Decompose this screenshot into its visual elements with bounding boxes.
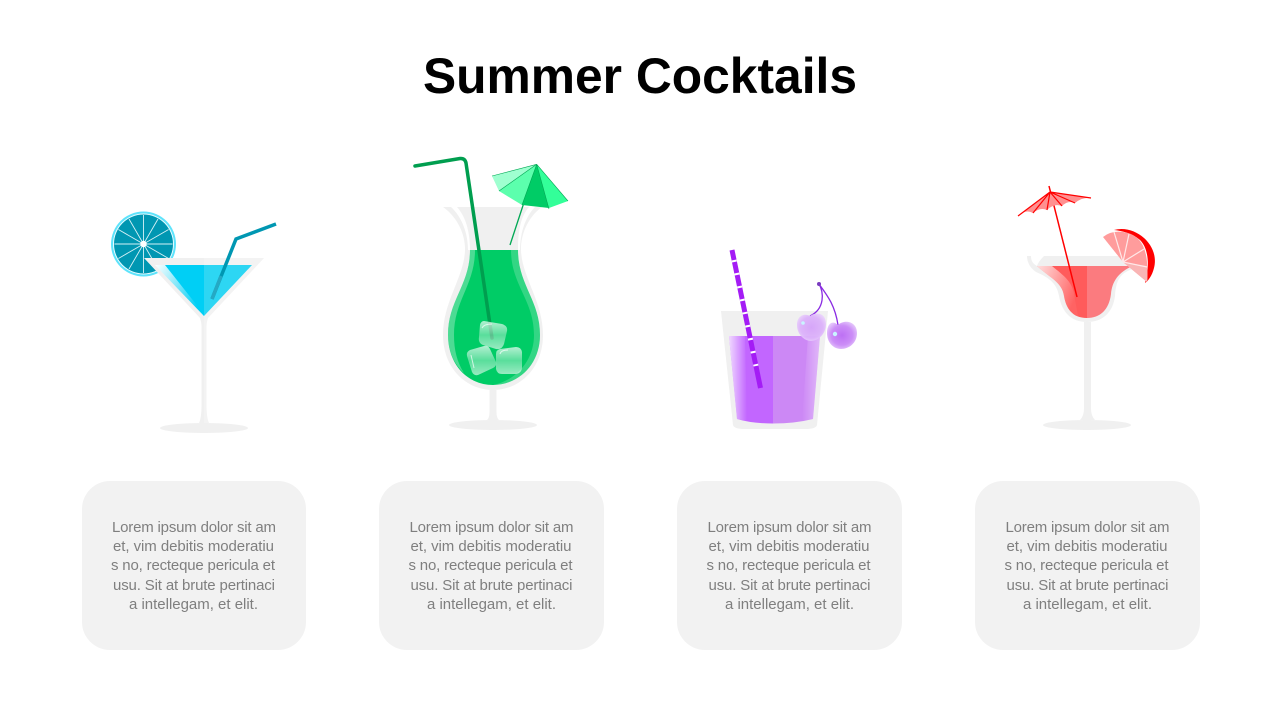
card text: et, vim debitis moderatiu — [113, 538, 274, 555]
card text: s no, recteque pericula et — [706, 557, 871, 574]
card text — [111, 519, 276, 613]
card text: Lorem ipsum dolor sit am — [708, 519, 872, 536]
icon: cherries — [797, 282, 857, 349]
card text — [408, 519, 574, 613]
cocktail: green hurricane — [415, 158, 568, 430]
card text: Lorem ipsum dolor sit am — [410, 519, 574, 536]
card text: a intellegam, et elit. — [725, 596, 854, 613]
card text: et, vim debitis moderatiu — [708, 538, 870, 555]
card text: a intellegam, et elit. — [129, 596, 258, 613]
icon: grapefruit wedge — [1103, 229, 1155, 283]
icon: cocktail umbrella — [492, 164, 568, 245]
glass: hurricane — [443, 207, 543, 430]
liquid — [155, 265, 252, 316]
straw — [732, 250, 760, 388]
card text — [1004, 519, 1170, 613]
icon: cocktail umbrella — [1018, 186, 1091, 297]
liquid — [1037, 266, 1133, 318]
card text: s no, recteque pericula et — [111, 557, 276, 574]
glass: martini — [144, 258, 264, 433]
card text: s no, recteque pericula et — [1004, 557, 1169, 574]
straw — [415, 158, 492, 338]
icon: ice cubes — [467, 321, 522, 375]
card text: usu. Sit at brute pertinaci — [410, 577, 572, 594]
card text: usu. Sit at brute pertinaci — [113, 577, 275, 594]
card text: usu. Sit at brute pertinaci — [1006, 577, 1168, 594]
panel: text card 1 — [82, 481, 306, 650]
card text: usu. Sit at brute pertinaci — [708, 577, 870, 594]
straw — [212, 224, 276, 299]
cocktail: red margarita — [1018, 186, 1155, 430]
card text: a intellegam, et elit. — [1023, 596, 1152, 613]
card text — [706, 519, 872, 613]
title: Summer Cocktails — [423, 48, 857, 104]
card text: et, vim debitis moderatiu — [410, 538, 572, 555]
panel: text card 3 — [677, 481, 902, 650]
liquid — [448, 250, 540, 385]
glass: margarita — [1027, 256, 1138, 430]
panel: text card 4 — [975, 481, 1200, 650]
icon: citrus slice — [111, 212, 176, 276]
glass: tumbler — [721, 311, 828, 429]
liquid — [729, 336, 820, 424]
card text: et, vim debitis moderatiu — [1006, 538, 1168, 555]
cocktail: blue martini — [111, 212, 276, 433]
card text: a intellegam, et elit. — [427, 596, 556, 613]
card text: Lorem ipsum dolor sit am — [112, 519, 276, 536]
panel: text card 2 — [379, 481, 604, 650]
card text: Lorem ipsum dolor sit am — [1006, 519, 1170, 536]
card text: s no, recteque pericula et — [408, 557, 573, 574]
cocktail: purple tumbler — [721, 250, 857, 429]
